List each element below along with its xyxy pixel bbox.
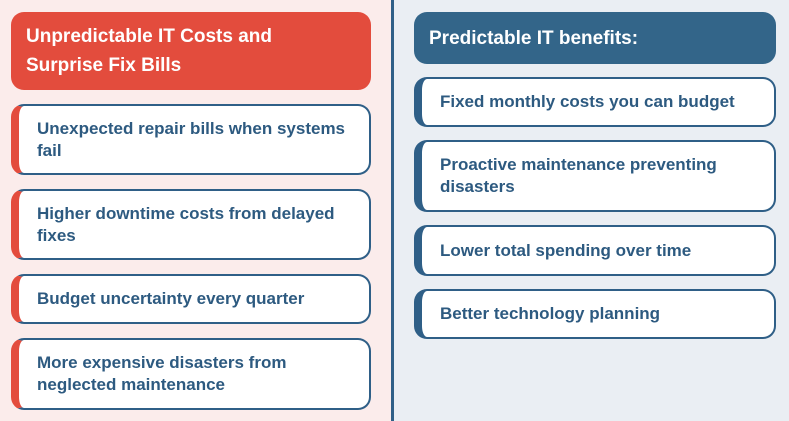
item: fixed monthly [414,77,776,127]
panel: left background [0,0,391,421]
heading: predictable benefits: Predictable IT benefits: [429,28,638,48]
heading: predictable benefits [414,12,776,64]
item: lower spending [414,225,776,276]
item: budget uncertainty: Budget uncertainty every quarter [37,289,304,308]
heading: unpredictable costs: Surprise Fix Bills [26,55,181,76]
heading: unpredictable costs [11,12,371,90]
panel: right background [394,0,789,421]
item: unexpected repair: Unexpected repair bills when systems fail [37,118,345,160]
item: proactive: Proactive maintenance preventing disasters [440,155,717,196]
item: downtime: Higher downtime costs from delayed fixes [37,204,335,244]
item: expensive disasters: More expensive disasters from neglected maintenance [37,353,286,394]
item: proactive [414,140,776,212]
item: budget uncertainty [11,274,371,324]
item: downtime [11,189,371,260]
item: lower spending: Lower total spending over time [440,240,691,260]
item: better planning: Better technology planning [440,304,660,323]
item: fixed monthly: Fixed monthly costs you can budget [440,92,735,111]
heading: unpredictable costs: Unpredictable IT Costs and [26,26,272,47]
item: better planning [414,289,776,339]
item: expensive disasters [11,338,371,410]
item: unexpected repair [11,104,371,175]
